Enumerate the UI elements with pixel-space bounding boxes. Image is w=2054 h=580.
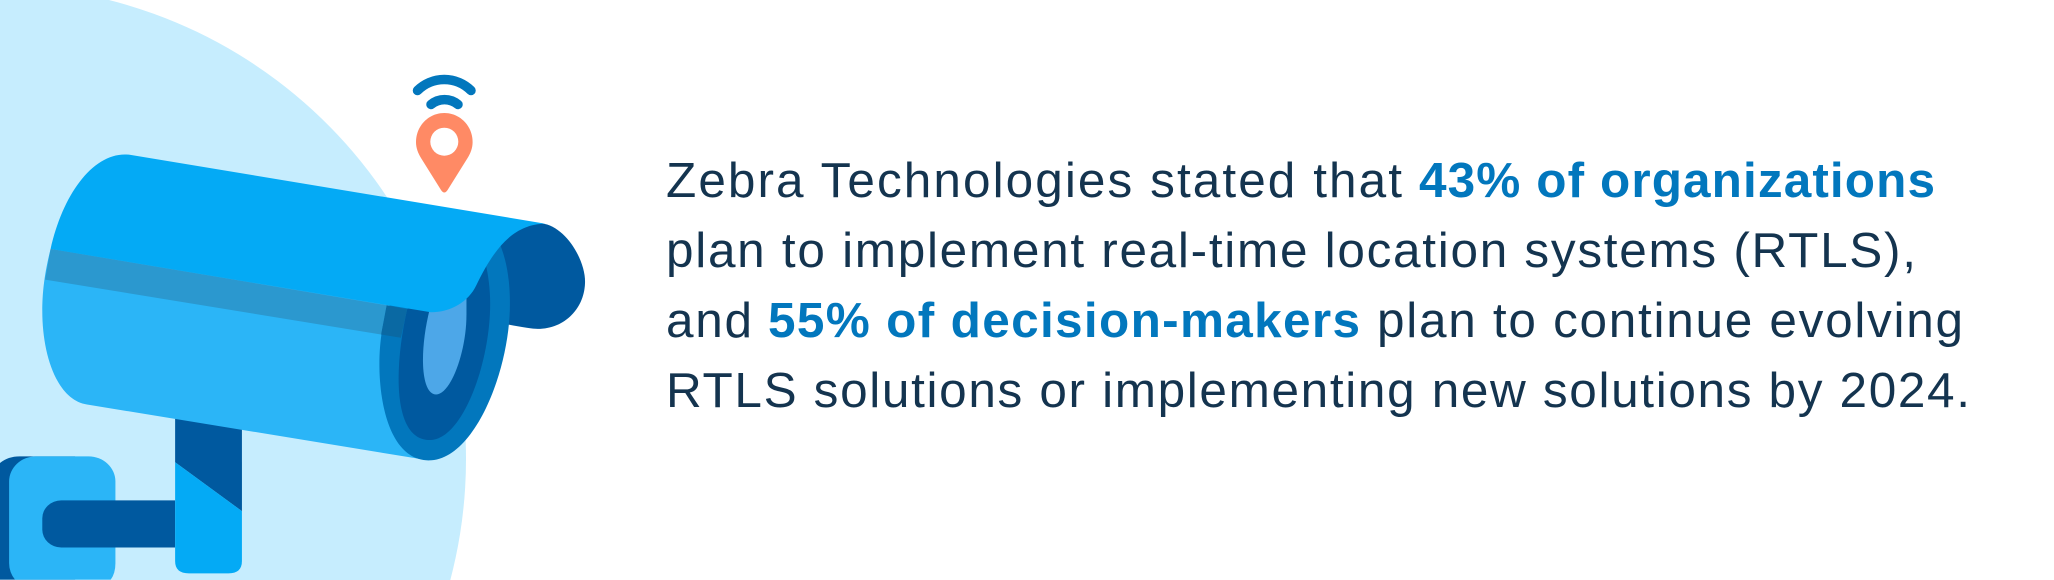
icon: security camera	[0, 154, 585, 580]
mount arm	[42, 500, 175, 547]
icon: location pin	[416, 113, 473, 192]
text block: statistics statement: plan to continue evolving	[1377, 293, 1963, 348]
body stripe	[45, 249, 407, 338]
camera back cap	[455, 223, 585, 329]
text block: statistics statement: 43% of organizations	[1419, 153, 1935, 208]
background circle	[0, 0, 466, 580]
text block: statistics statement: plan to implement real-time location systems (RTLS),	[666, 223, 1916, 278]
icon: wifi signal	[418, 79, 471, 104]
lens glass	[423, 293, 466, 394]
text block: statistics statement: 55% of decision-makers	[768, 293, 1360, 348]
lens inner	[399, 263, 490, 440]
mount post	[175, 415, 242, 573]
camera body	[42, 249, 431, 460]
lens ring	[379, 244, 510, 460]
mount plate	[0, 456, 115, 580]
text block: statistics statement: Zebra Technologies stated that	[666, 153, 1402, 208]
text block: statistics statement: and	[666, 293, 752, 348]
text block: statistics statement	[666, 153, 1970, 418]
camera hood	[51, 154, 546, 312]
text block: statistics statement: RTLS solutions or implementing new solutions by 2024.	[666, 363, 1970, 418]
